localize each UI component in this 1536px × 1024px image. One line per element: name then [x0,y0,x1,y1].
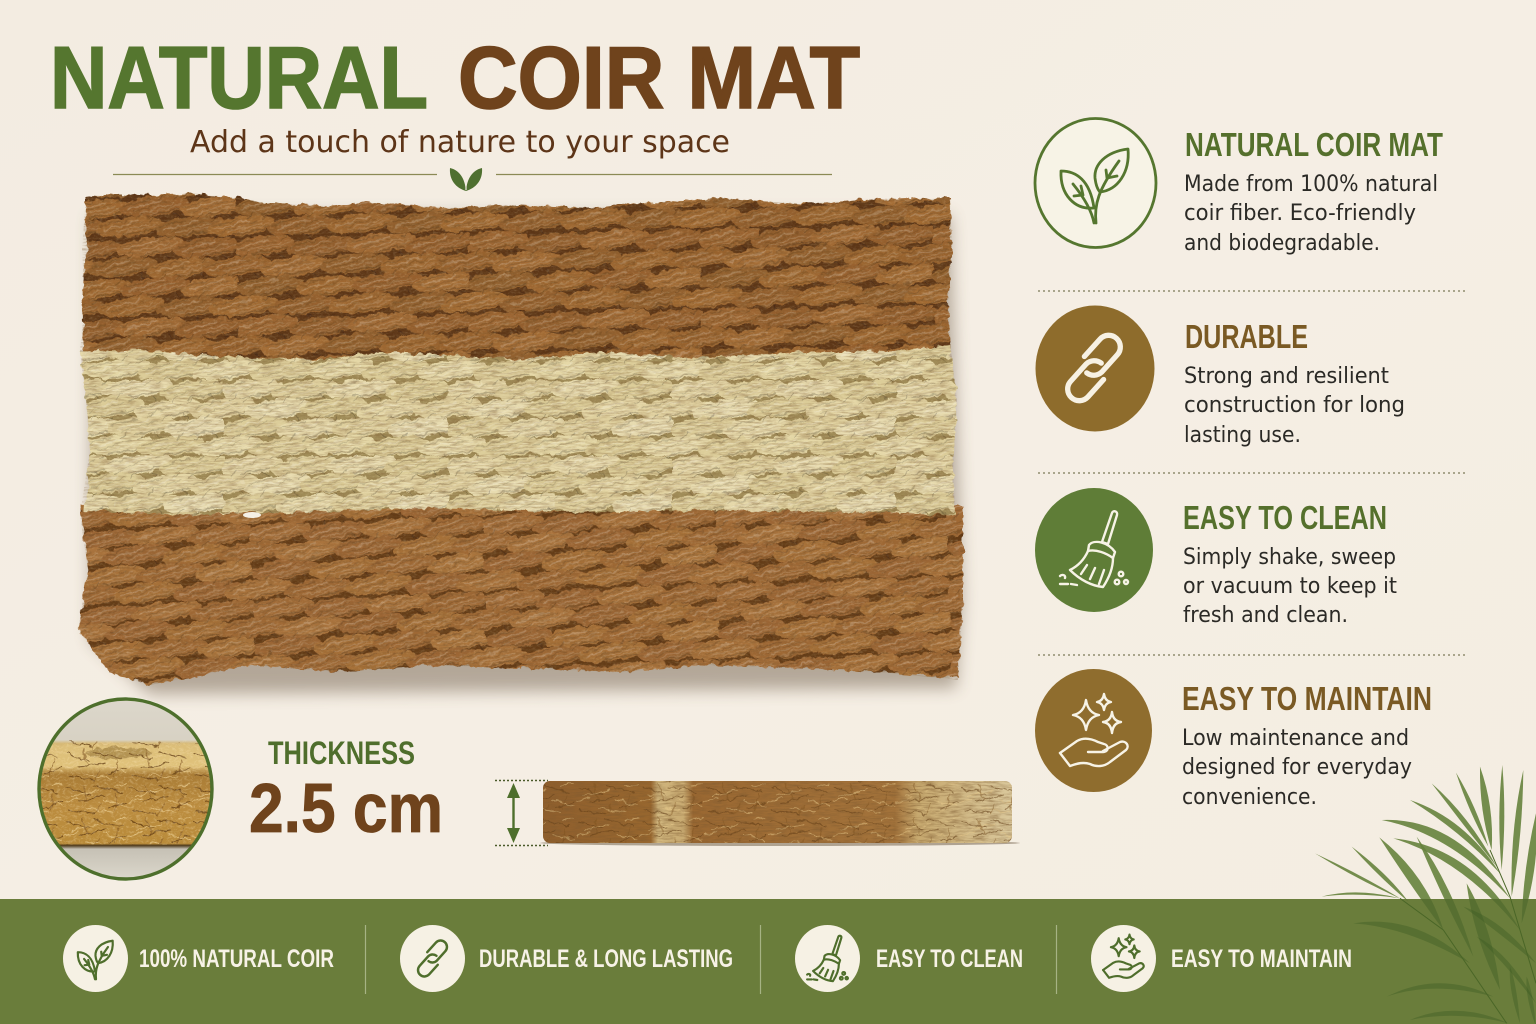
feature: natural coir mat [1035,118,1443,256]
subtitle: Add a touch of nature to your space [190,125,730,160]
title divider with leaf [113,168,832,191]
description [1184,364,1405,448]
description [1183,545,1397,628]
icon: leaf badge [1035,118,1156,248]
icon: broom badge [1035,488,1153,612]
description: Low maintenance and [1182,726,1409,751]
thickness dimension arrow [495,780,548,846]
heading: EASY TO MAINTAIN [1182,680,1432,717]
feature: easy to maintain [1035,669,1432,810]
feature: easy to clean [1035,488,1397,628]
title: COIR MAT [458,28,860,127]
description: designed for everyday [1182,755,1412,780]
description: and biodegradable. [1184,231,1380,256]
description: fresh and clean. [1183,603,1348,628]
title: NATURAL [50,28,428,127]
mat shadow [90,215,962,694]
benefit: 100% natural coir [63,925,334,992]
description [1184,172,1438,256]
description: lasting use. [1184,423,1301,448]
benefit: durable and long lasting [400,925,733,992]
heading: NATURAL COIR MAT [1185,126,1443,163]
bottom benefits bar [0,899,1536,1024]
benefit: easy to maintain [1091,925,1352,992]
benefit: easy to maintain: EASY TO MAINTAIN [1171,945,1352,973]
feature: durable [1036,306,1405,448]
benefit: easy to clean [795,925,1023,992]
thickness label: THICKNESS [268,735,415,771]
icon: hand and sparkles badge [1035,669,1152,792]
description: Made from 100% natural [1184,172,1438,197]
heading: DURABLE [1185,318,1308,355]
benefit: durable and long lasting: DURABLE & LONG LASTING [479,945,733,973]
description: Strong and resilient [1184,364,1389,389]
description: construction for long [1184,393,1405,418]
white fibre speck [243,512,261,518]
top brown band [82,193,952,362]
palm frond decoration [1315,765,1536,1024]
description: convenience. [1182,785,1317,810]
fibre texture [70,185,970,695]
cream centre band [80,345,957,515]
heading: EASY TO CLEAN [1183,499,1387,536]
benefit: easy to clean: EASY TO CLEAN [876,945,1023,973]
main coir mat photo [70,185,970,695]
icon: chain badge [1036,306,1154,432]
description: coir fiber. Eco-friendly [1184,201,1416,226]
thickness value: 2.5 cm [249,769,443,847]
description [1182,726,1412,810]
mat side view [540,781,1020,846]
bottom brown band [78,505,963,685]
description: Simply shake, sweep [1183,545,1396,570]
benefit: 100% natural coir: 100% NATURAL COIR [139,945,334,973]
description: or vacuum to keep it [1183,574,1397,599]
mat fabric with three bands [78,193,963,685]
thickness close-up circle [30,697,220,881]
